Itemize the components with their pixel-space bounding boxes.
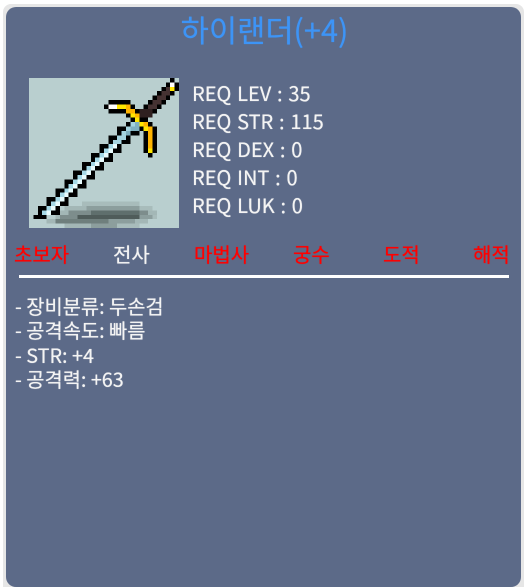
class: warrior: 전사	[113, 239, 150, 268]
stat: attack speed: - 공격속도: 빠름	[15, 315, 145, 344]
stat: attack power: - 공격력: +63	[15, 364, 124, 393]
title: 하이랜더(+4)	[181, 6, 348, 51]
req dex: REQ DEX : 0	[192, 134, 302, 163]
icon: sword on pale background	[29, 78, 179, 228]
stat: equipment type: - 장비분류: 두손검	[15, 291, 164, 320]
class: thief: 도적	[383, 239, 420, 268]
req level: REQ LEV : 35	[192, 78, 311, 107]
class availability row	[14, 239, 510, 268]
class: beginner: 초보자	[14, 239, 69, 268]
requirements list	[192, 78, 324, 219]
item stats list	[15, 291, 164, 393]
stat: str: - STR: +4	[15, 340, 94, 369]
class: archer: 궁수	[293, 239, 330, 268]
divider line	[19, 275, 509, 278]
class: pirate: 해적	[473, 239, 510, 268]
req int: REQ INT : 0	[192, 162, 298, 191]
req luk: REQ LUK : 0	[192, 190, 303, 219]
req str: REQ STR : 115	[192, 106, 324, 135]
class: magician: 마법사	[194, 239, 249, 268]
